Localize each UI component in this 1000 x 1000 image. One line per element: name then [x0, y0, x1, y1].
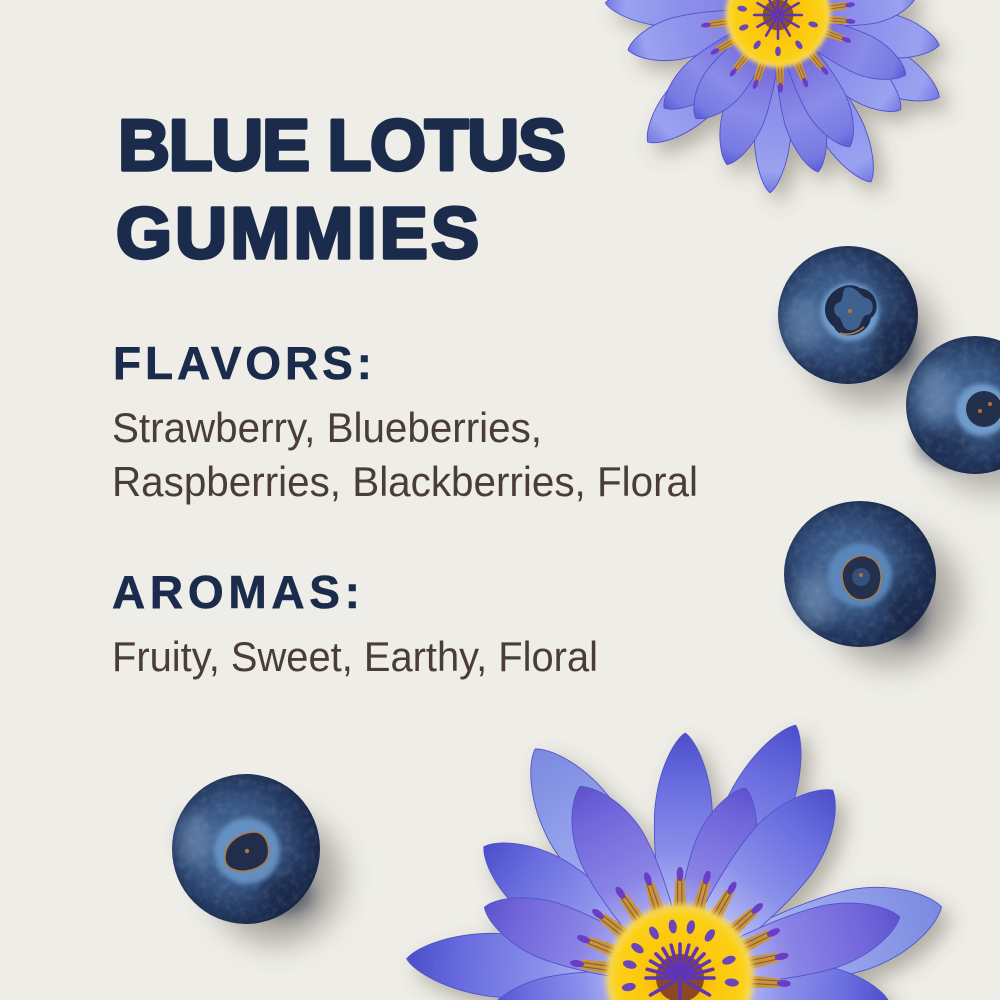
text: flavors list	[112, 404, 698, 505]
icon: blueberry middle	[784, 501, 960, 666]
title: BLUE LOTUS	[118, 106, 566, 186]
title	[116, 106, 566, 274]
icon: blueberry lower left	[172, 774, 342, 944]
text: flavors list: Raspberries, Blackberries, Floral	[112, 458, 698, 505]
icon: blueberry upper	[778, 246, 938, 404]
icon: top lotus flower	[604, 0, 950, 194]
icon: blueberry right	[906, 336, 1000, 492]
icon: bottom lotus flower	[404, 712, 952, 1000]
heading: aromas: AROMAS:	[112, 566, 360, 618]
text: flavors list: Strawberry, Blueberries,	[112, 404, 542, 451]
title: GUMMIES	[116, 194, 479, 274]
text: aromas list: Fruity, Sweet, Earthy, Floral	[112, 633, 598, 680]
center: top flower stamens	[700, 0, 856, 93]
center: bottom flower stamens	[569, 867, 791, 1000]
heading: flavors: FLAVORS:	[113, 337, 372, 389]
